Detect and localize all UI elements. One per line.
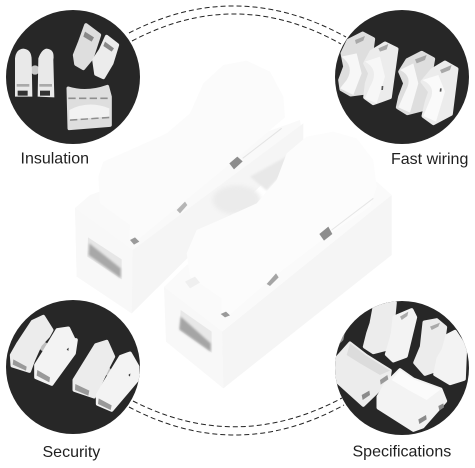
front connector [164, 132, 392, 388]
main product: two white connectors [75, 61, 392, 388]
panel: fast wiring [335, 10, 469, 168]
label: Insulation: Insulation [20, 150, 89, 168]
icon: four connectors at an angle [12, 317, 138, 410]
dashed arcs: bottom [129, 398, 344, 435]
icon: disassembled connector parts [15, 25, 117, 128]
label: Fast wiring: Fast wiring [391, 151, 468, 168]
back connector [75, 61, 303, 313]
panel: insulation [6, 10, 140, 168]
icon: six connectors in two rows [335, 303, 465, 430]
label: Specifications: Specifications [352, 444, 451, 460]
dashed arcs: top [129, 6, 346, 44]
panel: security [6, 300, 140, 461]
panel: specifications [335, 301, 469, 460]
label: Security: Security [42, 444, 100, 461]
icon: four connectors in a row [340, 33, 457, 123]
